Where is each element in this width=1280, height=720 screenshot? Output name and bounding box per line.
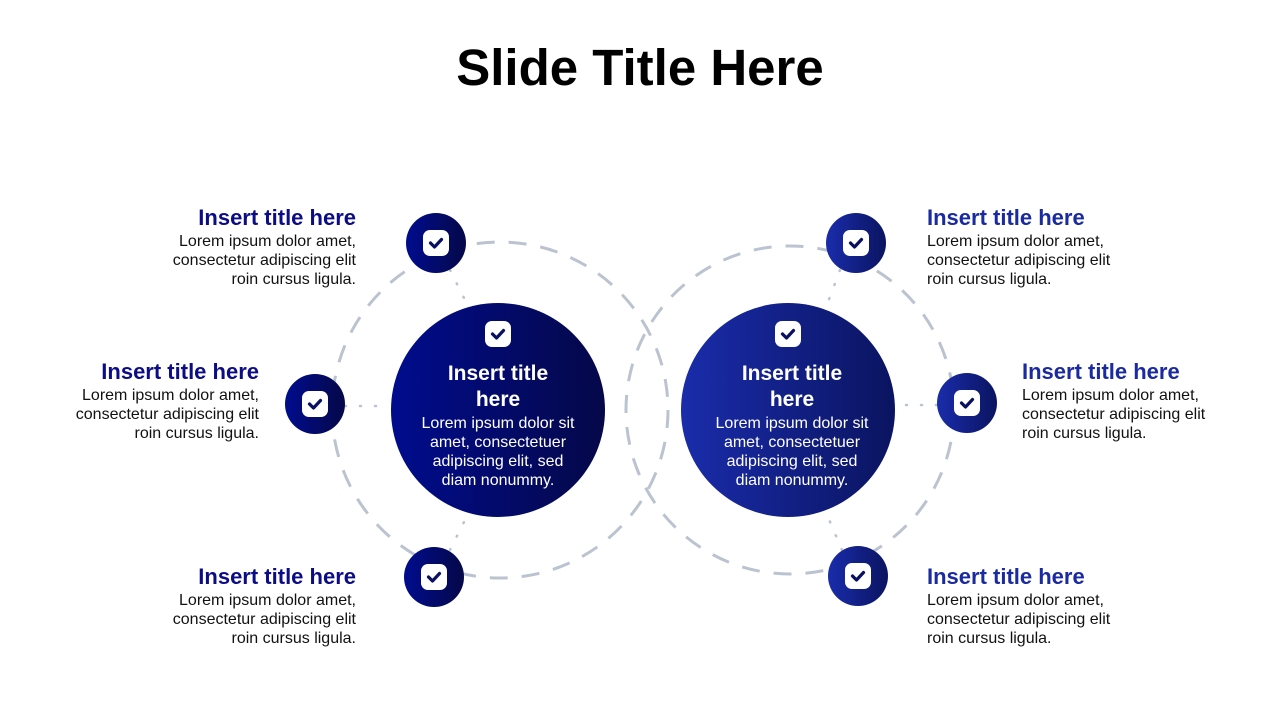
- dashed rings: [332, 242, 954, 578]
- center text right: here: [770, 388, 814, 411]
- text: left bottom: Insert title here: [198, 564, 356, 589]
- text: left bottom: roin cursus ligula.: [232, 630, 356, 647]
- text: left middle: consectetur adipiscing elit: [76, 406, 259, 423]
- left small icons: [285, 213, 466, 607]
- center text right: [716, 362, 868, 489]
- center text right: Lorem ipsum dolor sit amet, consectetuer adipiscing elit, sed diam nonummy.: [716, 415, 868, 489]
- text: left top: consectetur adipiscing elit: [173, 252, 356, 269]
- text: left bottom: Lorem ipsum dolor amet,: [179, 592, 356, 609]
- text: left top: roin cursus ligula.: [232, 271, 356, 288]
- center text left: here: [476, 388, 520, 411]
- text: right middle: [1022, 359, 1206, 442]
- text: right middle: Insert title here: [1022, 359, 1180, 384]
- text: left middle: Lorem ipsum dolor amet,: [82, 387, 259, 404]
- text: right top: [927, 205, 1110, 288]
- text: right bottom: Insert title here: [927, 564, 1085, 589]
- center text right: Insert title: [742, 362, 842, 385]
- text: left top: Lorem ipsum dolor amet,: [179, 233, 356, 250]
- center text left: Lorem ipsum dolor sit amet, consectetuer adipiscing elit, sed diam nonummy.: [422, 415, 574, 489]
- text: right bottom: consectetur adipiscing elit: [927, 611, 1110, 628]
- text: right bottom: Lorem ipsum dolor amet,: [927, 592, 1104, 609]
- text: right top: Insert title here: [927, 205, 1085, 230]
- right small icons: [826, 213, 997, 606]
- text: left bottom: [173, 564, 356, 647]
- text: left middle: Insert title here: [101, 359, 259, 384]
- text: left middle: [76, 359, 259, 442]
- left big circle: [391, 303, 605, 517]
- text: left bottom: consectetur adipiscing elit: [173, 611, 356, 628]
- right big circle: [681, 303, 895, 517]
- dotted connectors: [345, 270, 937, 550]
- text: left top: [173, 205, 356, 288]
- text: right bottom: roin cursus ligula.: [927, 630, 1052, 647]
- text: right middle: roin cursus ligula.: [1022, 425, 1146, 442]
- title: Slide Title Here: [456, 39, 824, 96]
- text: right top: Lorem ipsum dolor amet,: [927, 233, 1104, 250]
- text: right top: consectetur adipiscing elit: [927, 252, 1110, 269]
- text: right middle: consectetur adipiscing elit: [1022, 406, 1205, 423]
- center text left: [422, 362, 574, 489]
- text: right bottom: [927, 564, 1110, 647]
- center text left: Insert title: [448, 362, 548, 385]
- text: right middle: Lorem ipsum dolor amet,: [1022, 387, 1199, 404]
- text: right top: roin cursus ligula.: [927, 271, 1052, 288]
- text: left top: Insert title here: [198, 205, 356, 230]
- text: left middle: roin cursus ligula.: [134, 425, 259, 442]
